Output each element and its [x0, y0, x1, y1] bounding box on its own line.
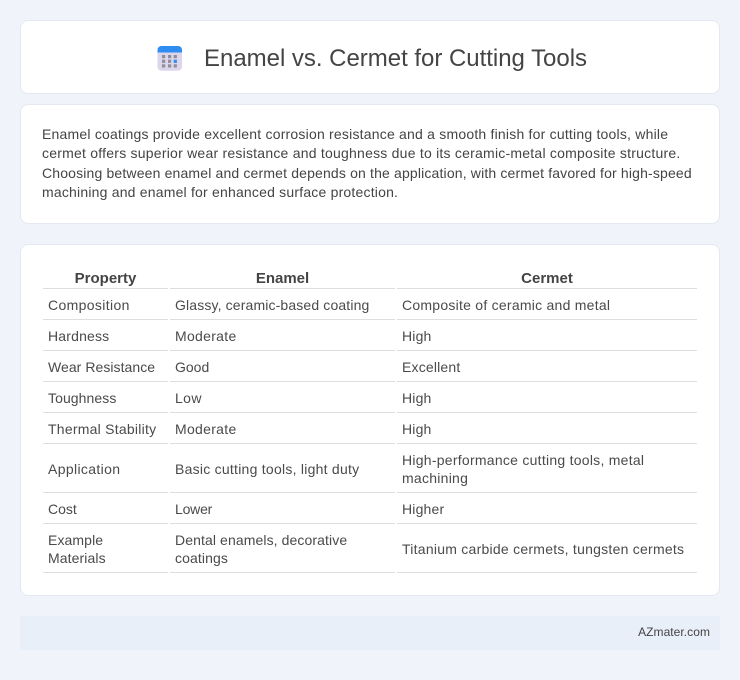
title: Enamel vs. Cermet for Cutting Tools [204, 45, 587, 72]
intro text: cermet offers superior wear resistance and toughness due to its ceramic-metal composite structure. [42, 145, 681, 161]
row: example materials [48, 532, 684, 566]
header row: Cermet [521, 270, 573, 287]
title card [20, 20, 720, 94]
footer [20, 616, 720, 650]
row: thermal stability [48, 421, 432, 437]
row: hardness [48, 328, 432, 344]
header row: Enamel [256, 270, 309, 287]
row: application: Basic cutting tools, light duty [175, 461, 359, 477]
row: example materials: coatings [175, 550, 228, 566]
row: example materials: Dental enamels, decorative [175, 532, 347, 548]
intro text [42, 126, 692, 200]
row: thermal stability: Thermal Stability [48, 421, 156, 437]
row: wear resistance [48, 359, 460, 375]
row: example materials: Example [48, 532, 103, 548]
row: toughness: Low [175, 390, 202, 406]
row: thermal stability: High [402, 421, 432, 437]
row: wear resistance: Good [175, 359, 209, 375]
row: wear resistance: Wear Resistance [48, 359, 155, 375]
comparison table panel [20, 244, 720, 596]
header row: Property [75, 270, 136, 287]
row: cost: Lower [175, 501, 212, 517]
row: wear resistance: Excellent [402, 359, 460, 375]
intro panel [20, 104, 720, 224]
row: hardness: High [402, 328, 432, 344]
row: cost [48, 501, 444, 517]
row: application: Application [48, 461, 120, 477]
row: hardness: Moderate [175, 328, 237, 344]
icon: calendar [158, 46, 182, 71]
row: composition: Composition [48, 297, 130, 313]
row: application: machining [402, 470, 468, 486]
footer source: AZmater.com [638, 625, 710, 639]
row: example materials: Titanium carbide cermets, tungsten cermets [402, 541, 684, 557]
row: composition: Composite of ceramic and metal [402, 297, 610, 313]
intro text: Choosing between enamel and cermet depends on the application, with cermet favored for high-speed [42, 165, 692, 181]
row: cost: Cost [48, 501, 77, 517]
comparison table [43, 270, 697, 573]
intro text: machining and enamel for enhanced surface protection. [42, 184, 398, 200]
intro text: Enamel coatings provide excellent corrosion resistance and a smooth finish for cutting tools, while [42, 126, 668, 142]
row: cost: Higher [402, 501, 444, 517]
row: application [48, 452, 644, 486]
row: toughness: High [402, 390, 432, 406]
row: composition: Glassy, ceramic-based coating [175, 297, 369, 313]
row: hardness: Hardness [48, 328, 109, 344]
row: toughness [48, 390, 432, 406]
row: composition [48, 297, 610, 313]
header row [75, 270, 573, 287]
row: thermal stability: Moderate [175, 421, 237, 437]
row: example materials: Materials [48, 550, 106, 566]
row: toughness: Toughness [48, 390, 116, 406]
row: application: High-performance cutting tools, metal [402, 452, 644, 468]
